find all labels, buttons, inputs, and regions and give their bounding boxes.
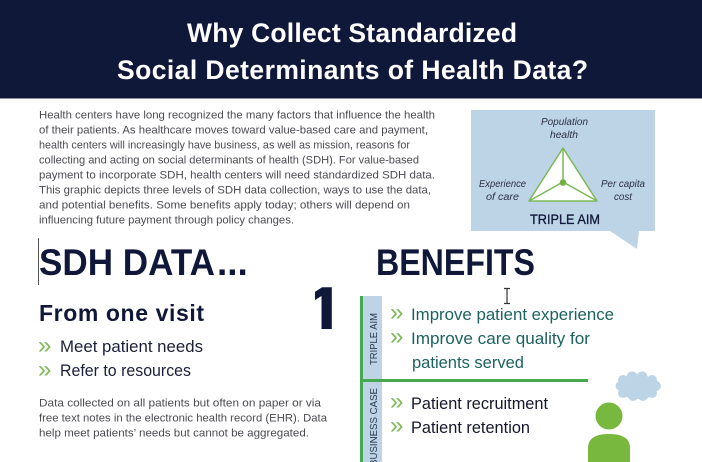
intro paragraph: health centers will increasingly have business, as well as mission, reasons for: [39, 140, 410, 152]
list: business case benefits: Patient retention: [411, 419, 530, 437]
heading: SDH data: SDH DATA: [39, 242, 215, 283]
icon: thought cloud: [616, 372, 661, 401]
triple aim labels: Population: [541, 116, 588, 128]
triple aim labels: health: [550, 129, 578, 141]
intro paragraph: and potential benefits. Some benefits apply today; others will depend on: [39, 200, 410, 212]
list: data uses: »: [38, 356, 51, 383]
triple aim labels: Experience: [479, 178, 526, 190]
intro paragraph: collecting and acting on social determinants of health (SDH). For value-based: [39, 154, 419, 166]
title: Social Determinants of Health Data?: [117, 55, 588, 85]
list: triple aim benefits: »: [390, 323, 403, 350]
icon: triple aim triangle: [529, 148, 597, 201]
triple aim heading: TRIPLE AIM: [530, 211, 600, 227]
list: data uses: Meet patient needs: [60, 338, 203, 356]
list: triple aim benefits: [390, 299, 614, 372]
data description paragraph: [39, 398, 328, 440]
intro paragraph: [39, 110, 435, 226]
list: data uses: Refer to resources: [60, 362, 191, 380]
intro paragraph: This graphic depicts three levels of SDH data collection, ways to use the data,: [39, 184, 431, 196]
list: business case benefits: »: [390, 388, 403, 415]
level number 1: 1: [304, 271, 346, 355]
header banner: [0, 0, 702, 98]
intro paragraph: influencing future payment through policy changes.: [39, 214, 294, 226]
list: data uses: »: [38, 332, 51, 359]
heading: SDH data: ...: [217, 242, 248, 283]
data description paragraph: free text notes in the electronic health record (EHR). Data: [39, 412, 328, 424]
title: [117, 18, 588, 85]
list: triple aim benefits: Improve care quality for: [411, 330, 591, 348]
strip label: triple aim: TRIPLE AIM: [368, 313, 380, 365]
benefits side strip: [360, 296, 588, 462]
intro paragraph: Health centers have long recognized the many factors that influence the health: [39, 110, 435, 122]
list: triple aim benefits: »: [390, 299, 403, 326]
data description paragraph: help meet patients’ needs but cannot be aggregated.: [39, 428, 309, 440]
list: business case benefits: »: [390, 412, 403, 439]
intro paragraph: payment to incorporate SDH, health centers will need standardized SDH data.: [39, 170, 435, 182]
list: data uses: [38, 332, 203, 383]
subheading: from one visit: From one visit: [39, 300, 204, 326]
list: business case benefits: Patient recruitment: [411, 395, 548, 413]
heading: benefits: BENEFITS: [376, 242, 535, 283]
icon: person: [588, 402, 630, 462]
list: triple aim benefits: Improve patient experience: [411, 306, 614, 324]
intro paragraph: of their patients. As healthcare moves toward value-based care and payment,: [39, 124, 428, 136]
list: triple aim benefits: patients served: [412, 354, 524, 372]
triple aim labels: of care: [486, 191, 519, 203]
panel: triple aim callout: [471, 110, 655, 249]
data description paragraph: Data collected on all patients but often on paper or via: [39, 398, 322, 410]
text cursor line: [38, 238, 39, 285]
title: Why Collect Standardized: [187, 18, 517, 48]
triple aim labels: cost: [614, 191, 633, 203]
icon: mouse i-beam cursor: [504, 288, 510, 304]
triple aim labels: Per capita: [601, 178, 645, 190]
list: business case benefits: [390, 388, 548, 439]
triple aim labels: [479, 116, 645, 203]
